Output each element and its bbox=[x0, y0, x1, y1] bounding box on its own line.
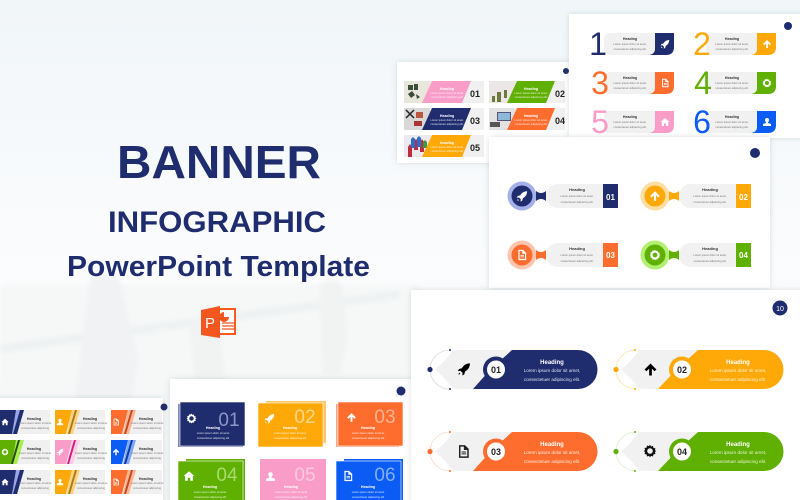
icon: powerpoint logo bbox=[201, 306, 236, 338]
tab 3: Heading bbox=[623, 76, 637, 80]
tab 5: 5 bbox=[591, 104, 609, 140]
pill 03: 03 bbox=[491, 447, 501, 457]
pill 03: Lorem ipsum dolor sit amet, bbox=[524, 450, 580, 455]
tab 5: Heading bbox=[623, 115, 637, 119]
card 05: 05 bbox=[294, 465, 316, 486]
card 06: Heading bbox=[361, 485, 375, 489]
tab 1: Heading bbox=[623, 37, 637, 41]
card 01: Heading bbox=[206, 426, 220, 430]
page badge bbox=[750, 148, 760, 158]
item 04: consectetuer adipiscing elit. bbox=[693, 259, 727, 263]
card 03 bbox=[336, 402, 403, 447]
tab 4: 4 bbox=[694, 65, 712, 101]
pill 04 bbox=[613, 431, 784, 472]
row 1 banners: Heading bbox=[139, 417, 153, 421]
row 2 banners: consectetuer adipiscing bbox=[21, 456, 50, 460]
banner 04: 04 bbox=[555, 116, 565, 126]
card 02: Lorem ipsum dolor sit amet bbox=[274, 431, 306, 435]
panel: numbered cards slide bbox=[170, 379, 415, 500]
tab 1: Lorem ipsum dolor sit amet, bbox=[613, 42, 647, 46]
tab 1: consectetuer adipiscing elit. bbox=[613, 47, 647, 51]
card 06: consectetuer adipiscing elit bbox=[352, 495, 384, 499]
pill 04: Lorem ipsum dolor sit amet, bbox=[710, 450, 766, 455]
row 2 banners: consectetuer adipiscing bbox=[77, 456, 106, 460]
banner 02: Lorem ipsum dolor sit amet, bbox=[514, 91, 548, 95]
banner 02: consectetuer adipiscing elit. bbox=[514, 95, 548, 99]
banner 05: Lorem ipsum dolor sit amet, bbox=[430, 145, 464, 149]
card 01 bbox=[178, 402, 245, 447]
banner 03: 03 bbox=[470, 116, 480, 126]
banner 03: Lorem ipsum dolor sit amet, bbox=[430, 118, 464, 122]
pill 02 bbox=[613, 349, 784, 390]
row 2 banners: Lorem ipsum dolor sit amet bbox=[19, 451, 51, 455]
title bbox=[67, 136, 370, 283]
panel: arrow pills slide bbox=[411, 290, 800, 500]
panel: photo banners slide bbox=[397, 62, 572, 163]
item 01 bbox=[508, 182, 618, 210]
row 2 banners: Lorem ipsum dolor sit amet bbox=[75, 451, 107, 455]
row 1 banners: consectetuer adipiscing bbox=[77, 426, 106, 430]
tab 5: Lorem ipsum dolor sit amet, bbox=[613, 120, 647, 124]
card 04: consectetuer adipiscing elit bbox=[194, 495, 226, 499]
item 04: Lorem ipsum dolor sit amet, bbox=[693, 253, 727, 257]
card 06 bbox=[336, 459, 403, 500]
card 01: consectetuer adipiscing elit bbox=[197, 436, 229, 440]
tab 3 bbox=[591, 65, 674, 101]
pill 01: 01 bbox=[491, 365, 501, 375]
card 02: consectetuer adipiscing elit bbox=[274, 436, 306, 440]
card 03: Heading bbox=[361, 426, 375, 430]
item 02 bbox=[640, 182, 751, 210]
card 04 bbox=[178, 459, 245, 500]
row 3 banners: consectetuer adipiscing bbox=[77, 486, 106, 490]
row 1 banners: Lorem ipsum dolor sit amet bbox=[131, 421, 163, 425]
row 1 banners: consectetuer adipiscing bbox=[21, 426, 50, 430]
item 03: Lorem ipsum dolor sit amet, bbox=[560, 253, 594, 257]
page badge bbox=[563, 68, 569, 74]
tab 6: consectetuer adipiscing elit. bbox=[715, 125, 749, 129]
panel: numbered tabs slide bbox=[569, 14, 800, 140]
pill 03 bbox=[427, 431, 598, 472]
row 3 banners: Heading bbox=[139, 477, 153, 481]
tab 3: Lorem ipsum dolor sit amet, bbox=[613, 81, 647, 85]
row 3 banners: consectetuer adipiscing bbox=[21, 486, 50, 490]
row 2 banners: Heading bbox=[83, 447, 97, 451]
item 03: 03 bbox=[606, 251, 615, 260]
tab 5 bbox=[591, 104, 674, 140]
row 3 banners bbox=[0, 470, 163, 494]
tab 4: Lorem ipsum dolor sit amet, bbox=[715, 81, 749, 85]
tab 3: 3 bbox=[591, 65, 609, 101]
tab 3: consectetuer adipiscing elit. bbox=[613, 86, 647, 90]
banner 04: Heading bbox=[524, 114, 538, 118]
page badge bbox=[784, 22, 792, 30]
banner 03: consectetuer adipiscing elit. bbox=[430, 122, 464, 126]
card 05: Heading bbox=[284, 485, 298, 489]
banner 05: consectetuer adipiscing elit. bbox=[430, 149, 464, 153]
tab 4 bbox=[694, 65, 776, 101]
tab 2: 2 bbox=[693, 26, 711, 62]
tab 2: Heading bbox=[725, 37, 739, 41]
row 3 banners: Lorem ipsum dolor sit amet bbox=[19, 481, 51, 485]
item 01: Lorem ipsum dolor sit amet, bbox=[560, 194, 594, 198]
row 1 banners: Lorem ipsum dolor sit amet bbox=[75, 421, 107, 425]
card 03: Lorem ipsum dolor sit amet bbox=[352, 431, 384, 435]
row 3 banners: Heading bbox=[83, 477, 97, 481]
banner 01: Lorem ipsum dolor sit amet, bbox=[430, 91, 464, 95]
card 06: Lorem ipsum dolor sit amet bbox=[352, 490, 384, 494]
tab 4: Heading bbox=[725, 76, 739, 80]
item 03 bbox=[508, 240, 618, 270]
heading: banner: BANNER bbox=[117, 136, 321, 188]
item 02: Heading bbox=[702, 187, 718, 192]
panel: circle connector slide bbox=[489, 137, 770, 288]
item 03: consectetuer adipiscing elit. bbox=[560, 259, 594, 263]
pill 01: Heading bbox=[540, 360, 564, 366]
row 2 banners: consectetuer adipiscing bbox=[133, 456, 162, 460]
tab 5: consectetuer adipiscing elit. bbox=[613, 125, 647, 129]
pill 03: consectetuer adipiscing elit. bbox=[524, 459, 580, 464]
card 05: consectetuer adipiscing elit bbox=[275, 495, 307, 499]
card 04: 04 bbox=[216, 465, 238, 486]
banner 01 bbox=[404, 81, 484, 103]
card 02 bbox=[258, 401, 326, 447]
item 01: Heading bbox=[569, 187, 585, 192]
banner 02 bbox=[489, 81, 565, 103]
card 04: Heading bbox=[203, 485, 217, 489]
pill 03: Heading bbox=[540, 442, 564, 448]
panel: icon grid slide bbox=[0, 398, 168, 500]
pill 02: Lorem ipsum dolor sit amet, bbox=[710, 368, 766, 373]
row 3 banners: Lorem ipsum dolor sit amet bbox=[131, 481, 163, 485]
card 06: 06 bbox=[374, 465, 396, 486]
card 03: 03 bbox=[374, 407, 396, 428]
item 01: 01 bbox=[606, 193, 615, 202]
row 1 banners: consectetuer adipiscing bbox=[133, 426, 162, 430]
banner 01: Heading bbox=[440, 87, 454, 91]
row 3 banners: Heading bbox=[27, 477, 41, 481]
item 02: Lorem ipsum dolor sit amet, bbox=[693, 194, 727, 198]
tab 2 bbox=[693, 26, 776, 62]
card 05: Lorem ipsum dolor sit amet bbox=[275, 490, 307, 494]
banner 04: consectetuer adipiscing elit. bbox=[514, 122, 548, 126]
item 02: consectetuer adipiscing elit. bbox=[693, 200, 727, 204]
pill 04: 04 bbox=[677, 447, 687, 457]
item 02: 02 bbox=[739, 193, 748, 202]
tab 1 bbox=[589, 26, 674, 62]
tab 4: consectetuer adipiscing elit. bbox=[715, 86, 749, 90]
card 02: 02 bbox=[294, 407, 316, 428]
banner 02: 02 bbox=[555, 89, 565, 99]
row 2 banners: Heading bbox=[139, 447, 153, 451]
banner 05 bbox=[404, 135, 484, 157]
icon: powerpoint logo: P bbox=[205, 315, 215, 332]
row 1 banners: Heading bbox=[27, 417, 41, 421]
page badge bbox=[396, 386, 406, 396]
tab 6 bbox=[693, 104, 776, 140]
page badge bbox=[772, 300, 788, 316]
pill 02: consectetuer adipiscing elit. bbox=[710, 377, 766, 382]
item 01: consectetuer adipiscing elit. bbox=[560, 200, 594, 204]
row 3 banners: consectetuer adipiscing bbox=[133, 486, 162, 490]
heading: powerpoint template: PowerPoint Template bbox=[67, 251, 370, 283]
banner 03: Heading bbox=[440, 114, 454, 118]
tab 6: Lorem ipsum dolor sit amet, bbox=[715, 120, 749, 124]
card 01: 01 bbox=[218, 410, 240, 431]
banner 04 bbox=[489, 108, 565, 130]
tab 2: consectetuer adipiscing elit. bbox=[715, 47, 749, 51]
tab 1: 1 bbox=[589, 26, 607, 62]
card 03: consectetuer adipiscing elit bbox=[352, 436, 384, 440]
banner 05: Heading bbox=[440, 141, 454, 145]
item 04 bbox=[640, 240, 751, 270]
row 3 banners: Lorem ipsum dolor sit amet bbox=[75, 481, 107, 485]
tab 2: Lorem ipsum dolor sit amet, bbox=[715, 42, 749, 46]
page badge: 10 bbox=[776, 306, 784, 313]
tab 6: 6 bbox=[693, 104, 711, 140]
pill 02: Heading bbox=[726, 360, 750, 366]
banner 04: Lorem ipsum dolor sit amet, bbox=[514, 118, 548, 122]
banner 03 bbox=[404, 108, 484, 130]
item 04: Heading bbox=[702, 246, 718, 251]
banner 01: consectetuer adipiscing elit. bbox=[430, 95, 464, 99]
row 2 banners bbox=[0, 440, 163, 464]
row 1 banners: Heading bbox=[83, 417, 97, 421]
pill 01: consectetuer adipiscing elit. bbox=[524, 377, 580, 382]
pill 01 bbox=[427, 349, 598, 390]
pill 04: Heading bbox=[726, 442, 750, 448]
tab 6: Heading bbox=[725, 115, 739, 119]
card 02: Heading bbox=[283, 426, 297, 430]
row 1 banners: Lorem ipsum dolor sit amet bbox=[19, 421, 51, 425]
card 05 bbox=[260, 459, 326, 500]
card 01: Lorem ipsum dolor sit amet bbox=[197, 431, 229, 435]
item 04: 04 bbox=[739, 251, 748, 260]
row 2 banners: Lorem ipsum dolor sit amet bbox=[131, 451, 163, 455]
pill 04: consectetuer adipiscing elit. bbox=[710, 459, 766, 464]
banner 01: 01 bbox=[470, 89, 480, 99]
page badge bbox=[160, 404, 168, 410]
row 2 banners: Heading bbox=[27, 447, 41, 451]
banner 05: 05 bbox=[470, 143, 480, 153]
card 04: Lorem ipsum dolor sit amet bbox=[194, 490, 226, 494]
row 1 banners bbox=[0, 410, 163, 434]
heading: infographic: INFOGRAPHIC bbox=[108, 206, 326, 239]
banner 02: Heading bbox=[524, 87, 538, 91]
item 03: Heading bbox=[569, 246, 585, 251]
pill 02: 02 bbox=[677, 365, 687, 375]
pill 01: Lorem ipsum dolor sit amet, bbox=[524, 368, 580, 373]
